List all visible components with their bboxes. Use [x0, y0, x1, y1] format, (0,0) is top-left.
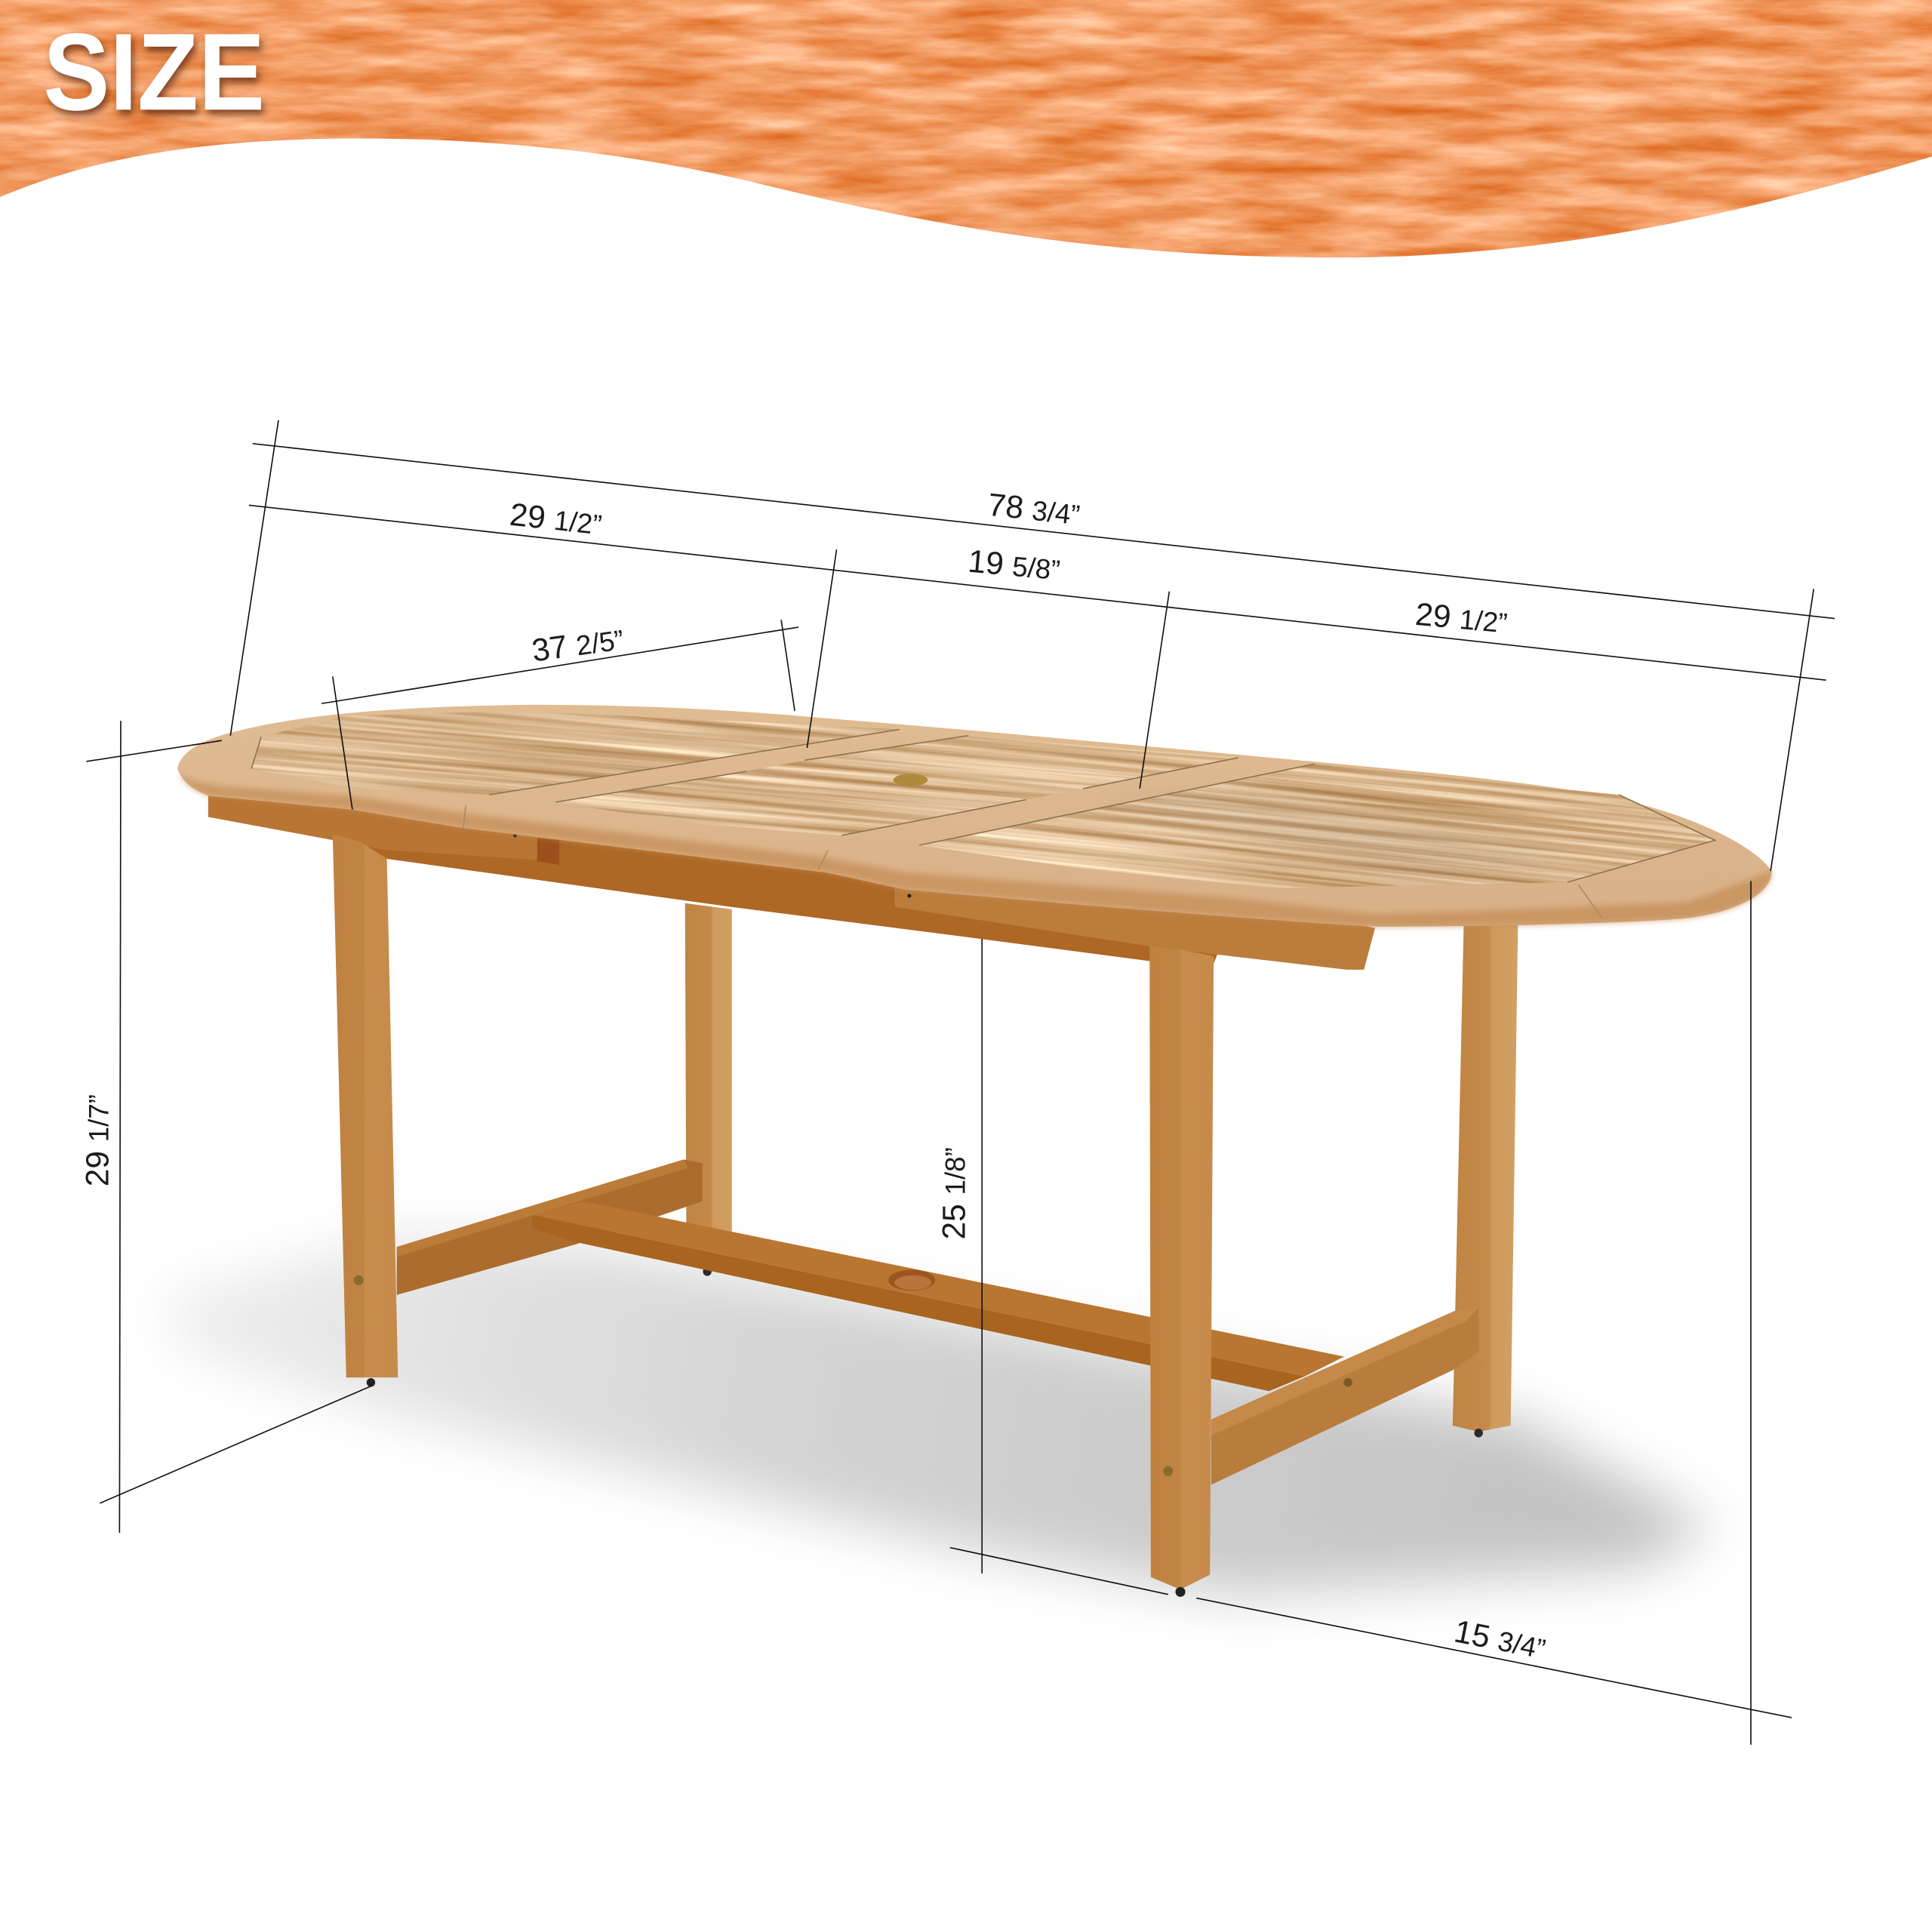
label: center section: 19 5/8” — [967, 543, 1062, 586]
label: total height: 29 1/7” — [80, 1094, 115, 1186]
label: overall length: 78 3/4” — [986, 487, 1081, 531]
label: leg span: 15 3/4” — [1451, 1613, 1549, 1666]
title: SIZE — [43, 10, 265, 133]
back legs — [685, 903, 1518, 1437]
header wood wave banner — [0, 0, 1932, 265]
label: width: 37 2/5” — [530, 620, 626, 669]
lower edge shading — [180, 774, 1772, 927]
label: right leaf: 29 1/2” — [1414, 596, 1509, 639]
edge seams — [463, 806, 1601, 918]
floor shadow — [160, 1238, 1712, 1595]
dimension lines — [86, 420, 1835, 1745]
umbrella hole — [894, 774, 928, 786]
table top edge — [177, 705, 1772, 927]
right cross stretcher — [1211, 1307, 1478, 1484]
table rail — [208, 789, 1375, 970]
front left leg — [333, 834, 398, 1387]
label: clearance height: 25 1/8” — [936, 1147, 971, 1239]
panel outlines — [251, 730, 1715, 882]
table illustration — [177, 637, 1772, 1597]
left cross stretcher — [397, 1159, 703, 1295]
left panel slats — [252, 712, 897, 795]
middle panel slats — [560, 737, 1236, 835]
grey grain streak — [1084, 789, 1589, 877]
right panel slats — [921, 764, 1713, 888]
center stretcher with umbrella hole — [532, 1201, 1344, 1391]
label: left leaf: 29 1/2” — [508, 497, 604, 541]
front right leg — [1149, 946, 1214, 1597]
